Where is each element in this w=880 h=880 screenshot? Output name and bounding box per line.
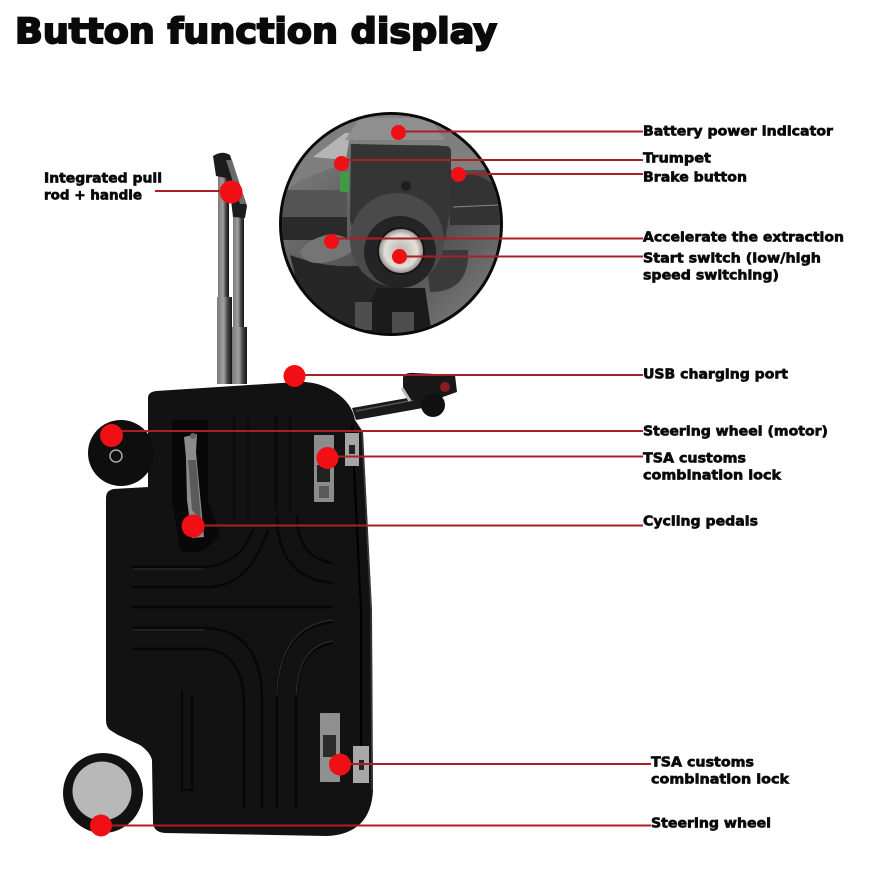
- front wheel: [88, 420, 154, 486]
- ring: [350, 193, 444, 287]
- label: USB: USB charging port: [643, 366, 789, 382]
- handlebar stem: [352, 373, 457, 420]
- label: integrated pull rod: Integrated pull: [44, 170, 162, 186]
- switch housing: [350, 144, 451, 240]
- pedal recess: [172, 420, 220, 552]
- bottom combination lock: [320, 713, 369, 783]
- suitcase body: [106, 382, 373, 836]
- label: battery: Battery power indicator: [643, 124, 833, 140]
- top combination lock: [314, 433, 359, 502]
- callout lines: [101, 132, 651, 826]
- lever: [300, 234, 358, 263]
- label: trumpet: Trumpet: [643, 150, 712, 166]
- label: brake: Brake button: [643, 170, 747, 186]
- rear wheel: [63, 753, 143, 833]
- callout dots: [90, 125, 466, 836]
- label: steering wheel: Steering wheel: [651, 816, 771, 832]
- pull rod and handle: [213, 153, 247, 384]
- label: integrated pull rod line 2: rod + handle: [44, 188, 142, 204]
- label: TSA top line 2: combination lock: [643, 468, 782, 484]
- label: TSA bottom: TSA customs: [651, 754, 754, 770]
- control close-up circle: [280, 113, 502, 335]
- start button: [378, 228, 424, 274]
- grip: [280, 190, 347, 217]
- title: Button function display: [15, 12, 497, 52]
- label: steering motor: Steering wheel (motor): [643, 424, 828, 440]
- label: start switch: Start switch (low/high: [643, 250, 821, 266]
- label: pedals: Cycling pedals: [643, 514, 758, 530]
- panel: body ribs: [131, 415, 333, 808]
- label: accelerate: Accelerate the extraction: [643, 230, 844, 246]
- label: start switch line 2: speed switching): [643, 268, 779, 284]
- label: TSA bottom line 2: combination lock: [651, 772, 790, 788]
- label: TSA top: TSA customs: [643, 450, 746, 466]
- stem: [366, 288, 430, 333]
- pedal: [184, 433, 204, 538]
